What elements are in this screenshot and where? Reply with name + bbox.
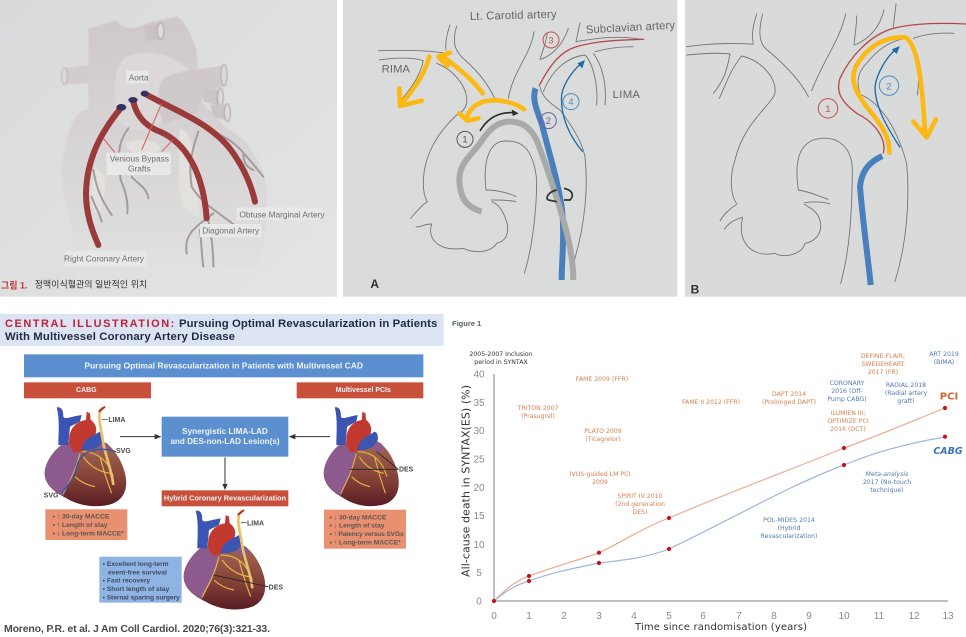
pointer arrows [103,103,173,153]
synergistic box: Synergistic LIMA-LAD [182,427,268,436]
synergistic box [162,417,288,457]
CABG trial annotations: RADIAL 2018 [886,382,926,389]
label: Venous Bypass Grafts: Grafts [128,163,151,173]
inclusion note: period in SYNTAX [474,359,528,366]
PCI trial annotations [517,353,905,516]
x tick labels: 0 [491,611,497,622]
CABG heart [44,407,131,506]
CABG heart: SVG [116,448,131,455]
label: Venous Bypass Grafts [107,153,171,175]
CABG trial annotations: 2016 (Off- [831,388,863,395]
x tick labels: 2 [561,611,567,622]
heading: CENTRAL ILLUSTRATION: [5,318,174,330]
numbered markers: 2 [886,81,892,91]
CABG trial annotations: technique) [870,487,904,494]
CABG trial annotations: ART 2019 [929,351,959,358]
hybrid header [162,490,288,506]
PCI trial annotations: IVUS-guided LM PCI [570,471,630,478]
PCI trial annotations: (Ticagrelor) [585,436,621,443]
hybrid outcomes: • Excellent long-term [103,561,169,568]
PCI outcomes: • ↓ 30-day MACCE [330,514,387,521]
figure caption [1,279,147,290]
vessel labels [370,9,676,291]
y axis title: All-cause death in SYNTAX(ES) (%) [460,385,472,577]
hybrid outcomes: event-free survival [108,569,167,576]
label: Right Coronary Artery: Right Coronary Artery [64,253,145,263]
multivessel PCI heart: DES [399,467,414,474]
PCI trial annotations: PLATO 2009 [584,428,622,435]
CABG outcomes: • ↑ 30-day MACCE [53,514,110,521]
CABG outcomes: • ↓ Long-term MACCE* [53,530,124,537]
grafts and catheter paths [459,39,644,280]
y tick labels: 0 [476,596,482,608]
heart illustration [62,17,268,268]
data points [492,406,947,603]
multivessel PCI heart [324,407,414,506]
hybrid heart: LIMA [247,521,264,528]
heading [0,314,444,346]
series label: PCI: PCI [940,392,958,402]
heading: Pursuing Optimal Revascularization in Patients [179,318,437,330]
inclusion note [469,351,533,366]
y tick labels: 5 [476,568,482,579]
PCI trial annotations: TRITON 2007 [517,405,559,412]
label: Aorta: Aorta [129,72,149,82]
PCI trial annotations: (Prolonged DAPT) [762,399,816,406]
numbered markers: 1 [462,135,468,145]
figure caption: 정맥이식혈관의 일반적인 위치 [35,279,147,290]
PCI outcomes [324,510,406,549]
hybrid heart [184,510,283,609]
x tick labels: 3 [596,611,602,622]
PCI trial annotations: DEFINE-FLAIR, [861,353,905,360]
hybrid outcomes [99,557,182,603]
CABG trial annotations: Pump CABG) [827,396,867,403]
CABG trial annotations: graft) [897,398,915,405]
inclusion note: 2005-2007 Inclusion [469,351,533,358]
y tick labels: 15 [473,511,485,522]
vessel labels: LIMA [613,89,640,101]
PCI curve [494,408,945,601]
PCI trial annotations: 2009 [592,479,608,486]
label: Obtuse Marginal Artery: Obtuse Marginal Artery [239,209,325,219]
CABG header: CABG [76,387,97,394]
hybrid heart: DES [269,584,283,591]
CABG header [24,382,151,398]
CABG trial annotations: (BIMA) [934,359,954,366]
label: Aorta [126,71,149,83]
PCI trial annotations: 2016 (OCT) [830,426,866,433]
panel: venous bypass graft heart [0,0,337,297]
series label: CABG: CABG [933,446,963,457]
top banner: Pursuing Optimal Revascularization in Patients with Multivessel CAD [84,360,363,370]
PCI trial annotations: 2017 (FR) [868,369,898,376]
multivessel PCI header [297,382,423,398]
yellow arrow [853,37,936,153]
numbered markers [457,32,579,147]
citation: Moreno, P.R. et al. J Am Coll Cardiol. 2020;76(3):321-33. [4,623,270,635]
PCI trial annotations: ILUMIEN III: [831,410,865,417]
x tick labels: 10 [838,611,850,622]
figure caption: 그림 1. [1,279,28,290]
PCI trial annotations: SPIRIT IV 2010 [617,493,663,500]
x tick labels: 7 [736,611,742,622]
PCI outcomes: • ↑ Long-term MACCE* [330,539,401,546]
synergistic box: and DES-non-LAD Lesion(s) [170,437,280,446]
PCI outcomes: • ↑ Patency versus SVGs [330,531,404,538]
PCI outcomes: • ↓ Length of stay [330,523,385,530]
top banner [24,354,423,377]
x tick labels: 13 [942,611,954,622]
CABG heart: LIMA [108,417,125,424]
vessel labels: RIMA [382,64,410,76]
panel A: aortic arch graft diagram [343,0,677,297]
x tick labels: 12 [908,611,920,622]
graft paths [839,23,966,285]
figure label: Figure 1 [452,319,481,328]
multivessel PCI header: Multivessel PCIs [336,387,391,394]
CABG trial annotations: Meta-analysis [866,470,909,478]
label: Right Coronary Artery [64,251,147,267]
arch outline [687,4,954,283]
CABG trial annotations: (Hybrid [778,525,800,532]
coronary branches [92,128,263,267]
PCI trial annotations: (2nd generation [615,501,665,508]
panel letter: B [691,282,700,296]
vein grafts [86,91,255,245]
x tick labels: 6 [700,611,706,622]
numbered markers: 4 [568,97,574,107]
arch outline [378,23,642,273]
CABG outcomes: • ↑ Length of stay [53,522,108,529]
flow arrows [120,434,330,490]
numbered markers: 3 [548,35,554,45]
x tick labels: 11 [874,611,885,622]
numbered markers: 1 [825,104,831,114]
x tick labels: 5 [666,611,672,622]
PCI trial annotations: DAPT 2014 [772,391,806,398]
axes [494,374,948,601]
panel B: subclavian graft diagram [685,0,966,297]
x tick labels [491,611,954,622]
heading: With Multivessel Coronary Artery Disease [5,331,235,343]
CABG outcomes [45,509,127,540]
panel: central illustration [0,314,444,609]
CABG curve [494,437,945,601]
label: Diagonal Artery: Diagonal Artery [202,225,260,235]
y tick labels: 25 [473,454,485,466]
y tick labels: 40 [473,370,485,380]
x axis title: Time since randomisation (years) [634,622,807,633]
CABG trial annotations [761,351,959,540]
label: Venous Bypass Grafts: Venious Bypass [110,154,169,164]
yellow arrows [399,53,524,121]
CABG trial annotations: 2017 (No-touch [863,479,911,486]
numbered markers: 2 [546,116,551,126]
hybrid outcomes: • Fast recovery [103,578,150,585]
PCI trial annotations: DES) [632,509,648,516]
y tick labels: 20 [473,483,485,494]
y tick labels [473,370,485,608]
y tick labels: 35 [473,398,485,409]
PCI trial annotations: FAME II 2012 (FFR) [682,399,740,406]
PCI trial annotations: SWEDEHEART [861,361,905,368]
CABG trial annotations: (Radial artery [885,390,927,397]
panel: SYNTAX all-cause death chart [460,351,963,633]
x tick labels: 9 [806,611,812,622]
hybrid outcomes: • Short length of stay [103,586,170,593]
numbered markers [818,76,899,118]
CABG trial annotations: CORONARY [830,380,865,387]
y tick labels: 10 [473,540,485,551]
x tick labels: 8 [771,611,777,622]
CABG trial annotations: Revascularization) [761,533,817,540]
y tick labels: 30 [473,426,485,437]
hybrid header: Hybrid Coronary Revascularization [164,493,287,502]
vessel labels: Subclavian artery [586,20,676,36]
vessel labels: A [370,277,379,291]
PCI trial annotations: (Prasugrel) [521,413,555,420]
hybrid outcomes: • Sternal sparing surgery [103,594,180,601]
x tick labels: 4 [631,611,637,622]
PCI trial annotations: FAME 2009 (FFR) [576,376,628,383]
vessel labels: Lt. Carotid artery [470,9,557,23]
x tick labels: 1 [526,611,532,622]
CABG trial annotations: POL-MIDES 2014 [763,517,815,524]
CABG heart: SVG [44,493,58,500]
label: Diagonal Artery [200,224,262,237]
PCI trial annotations: OPTIMIZE PCI [827,418,869,425]
